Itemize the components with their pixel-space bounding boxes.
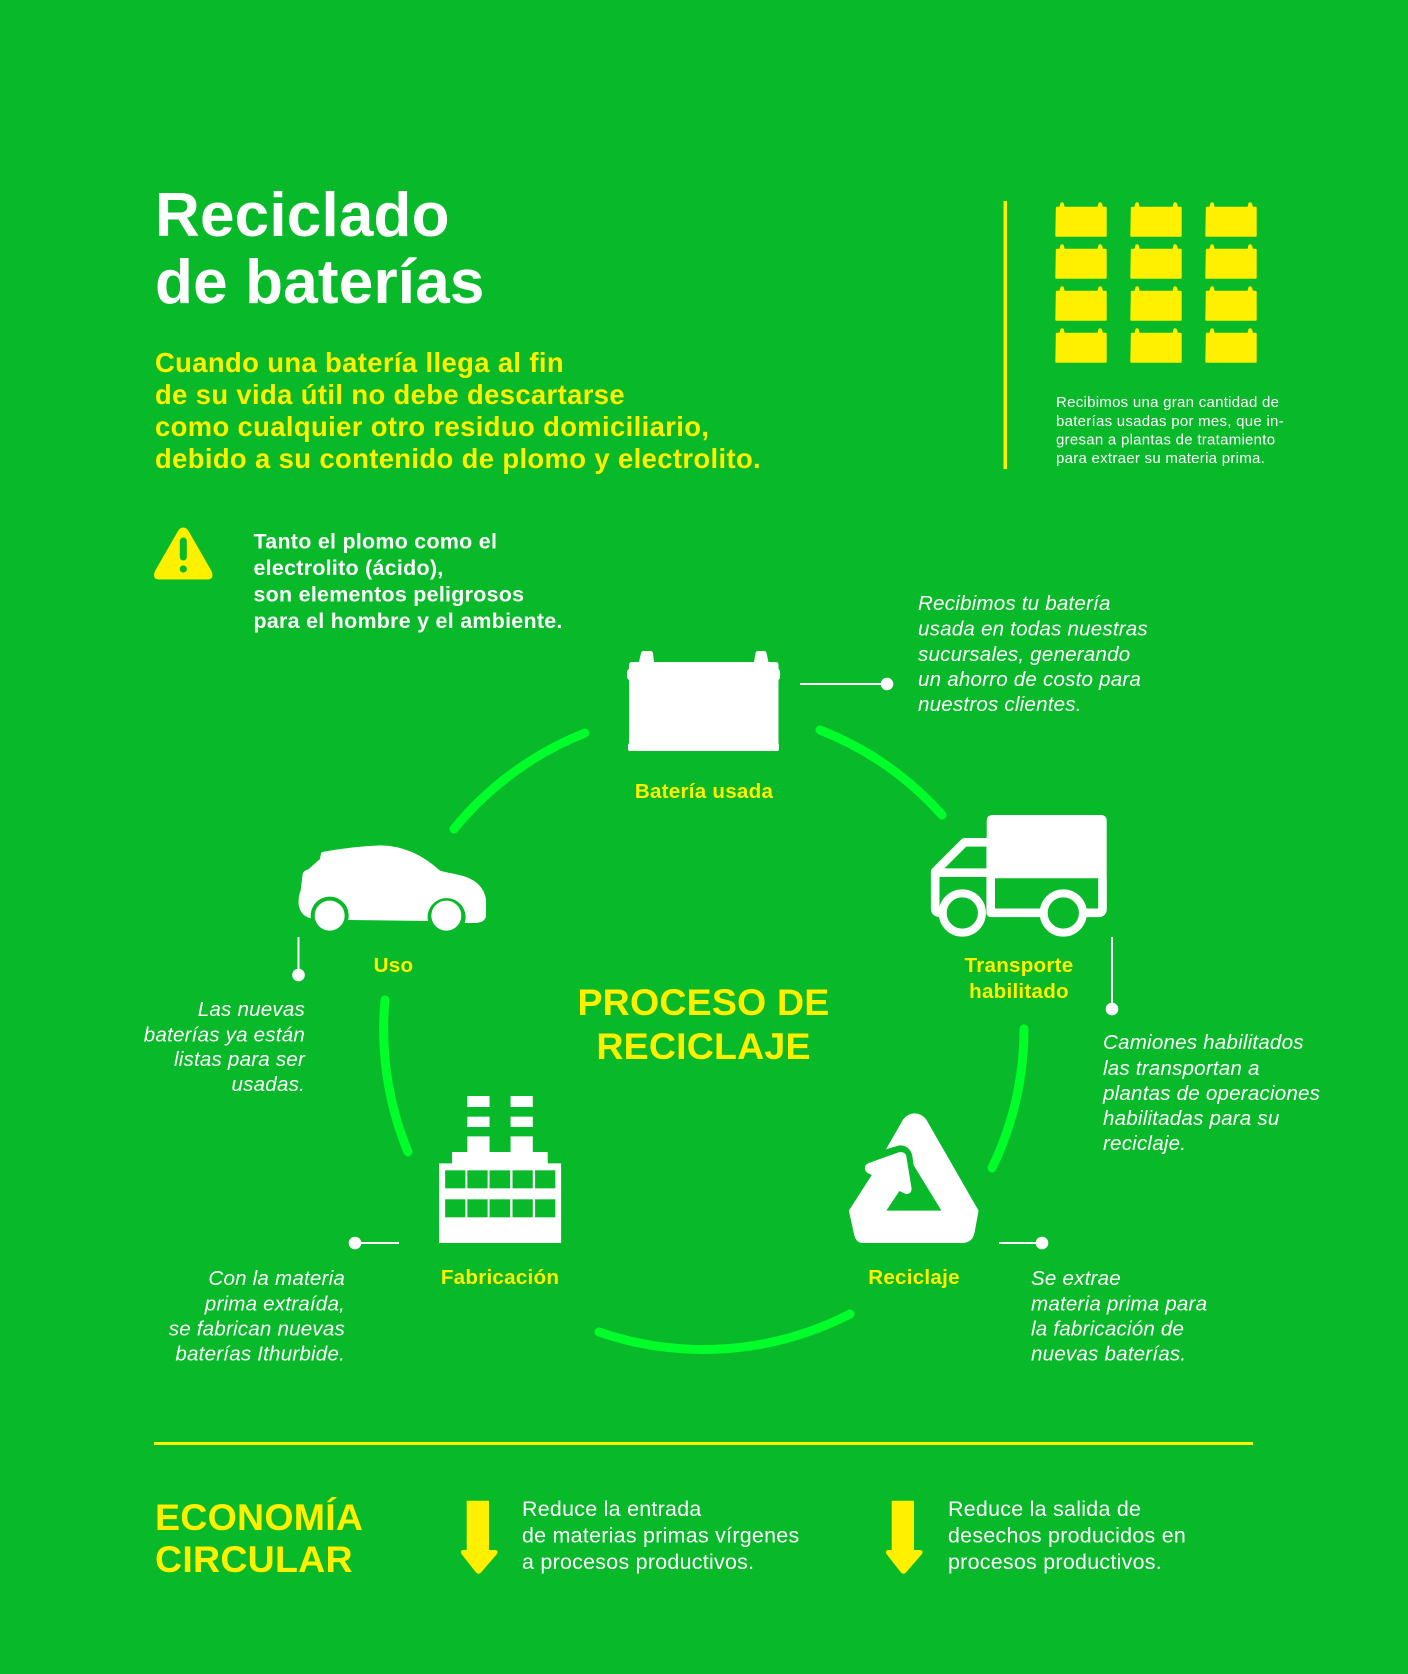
label: Batería usada — [635, 780, 773, 803]
step: transport — [935, 815, 1320, 1155]
description: prima extraída, — [204, 1292, 345, 1316]
description: nuevas baterías. — [1031, 1342, 1186, 1366]
cycle arcs — [384, 730, 1024, 1349]
step: use — [144, 845, 486, 1096]
step: used battery — [627, 592, 1148, 803]
description: las transportan a — [1103, 1057, 1260, 1080]
label: Transporte — [965, 954, 1073, 977]
icon: truck — [935, 815, 1107, 933]
description: usada en todas nuestras — [918, 618, 1148, 640]
icon: factory — [439, 1096, 561, 1243]
description: Camiones habilitados — [1103, 1031, 1304, 1054]
icon: recycling triangle — [849, 1113, 979, 1243]
panel: warning — [154, 528, 563, 633]
text: monthly batteries: Recibimos una gran cantidad de — [1056, 394, 1279, 411]
label: habilitado — [969, 980, 1069, 1003]
connector — [1106, 937, 1118, 1015]
text: warning: Tanto el plomo como el — [254, 530, 497, 554]
description: plantas de operaciones — [1102, 1082, 1320, 1105]
step: recycling — [849, 1113, 1207, 1366]
connector — [800, 678, 893, 690]
panel: monthly batteries — [1004, 201, 1284, 469]
subtitle: Cuando una batería llega al fin — [155, 347, 564, 378]
icon: car — [299, 845, 486, 931]
label: Uso — [374, 954, 413, 977]
subtitle: como cualquier otro residuo domiciliario, — [155, 411, 709, 442]
description: baterías Ithurbide. — [175, 1342, 345, 1366]
label: Reciclaje — [868, 1266, 960, 1289]
heading: ECONOMÍA — [155, 1496, 363, 1538]
connector — [292, 937, 305, 981]
description: baterías ya están — [144, 1024, 305, 1046]
description: Recibimos tu batería — [918, 592, 1111, 615]
text: warning: para el hombre y el ambiente. — [254, 609, 563, 633]
text: raw materials: Reduce la entrada — [522, 1497, 702, 1521]
connector — [999, 1237, 1048, 1249]
icon: battery grid — [1055, 202, 1257, 363]
subtitle: de su vida útil no debe descartarse — [155, 379, 625, 410]
title: Reciclado — [155, 181, 450, 250]
text: waste: procesos productivos. — [948, 1550, 1162, 1574]
panel: circular economy — [155, 1496, 1186, 1580]
icon: down arrow 1 — [461, 1501, 498, 1574]
description: sucursales, generando — [918, 643, 1130, 666]
description: Se extrae — [1031, 1267, 1121, 1290]
description: Las nuevas — [198, 998, 305, 1021]
description: usadas. — [232, 1073, 305, 1096]
text: warning: son elementos peligrosos — [254, 582, 524, 606]
text: warning: electrolito (ácido), — [254, 556, 444, 580]
subtitle: debido a su contenido de plomo y electrolito. — [155, 443, 761, 474]
icon: down arrow 2 — [886, 1501, 923, 1574]
description: la fabricación de — [1031, 1318, 1184, 1340]
center heading: RECICLAJE — [596, 1025, 811, 1067]
text: monthly batteries: para extraer su materia prima. — [1056, 450, 1265, 467]
text: monthly batteries: baterías usadas por mes, que in- — [1056, 413, 1284, 430]
description: Con la materia — [208, 1267, 345, 1290]
description: nuestros clientes. — [918, 693, 1082, 716]
text: monthly batteries: gresan a plantas de tratamiento — [1056, 432, 1275, 448]
text: raw materials: a procesos productivos. — [522, 1550, 754, 1574]
heading: CIRCULAR — [155, 1538, 353, 1580]
center heading: PROCESO DE — [577, 981, 830, 1023]
icon: battery — [627, 651, 780, 751]
description: se fabrican nuevas — [169, 1318, 345, 1340]
label: Fabricación — [441, 1266, 559, 1289]
description: listas para ser — [174, 1048, 306, 1071]
description: un ahorro de costo para — [918, 668, 1141, 691]
description: reciclaje. — [1103, 1132, 1186, 1155]
step: manufacturing — [169, 1096, 561, 1366]
icon: warning triangle — [154, 528, 212, 580]
title: de baterías — [155, 248, 485, 317]
description: habilitadas para su — [1103, 1107, 1280, 1130]
text: waste: desechos producidos en — [948, 1524, 1186, 1548]
connector — [349, 1237, 399, 1249]
description: materia prima para — [1031, 1292, 1207, 1316]
text: waste: Reduce la salida de — [948, 1497, 1141, 1521]
text: raw materials: de materias primas vírgenes — [522, 1524, 799, 1548]
